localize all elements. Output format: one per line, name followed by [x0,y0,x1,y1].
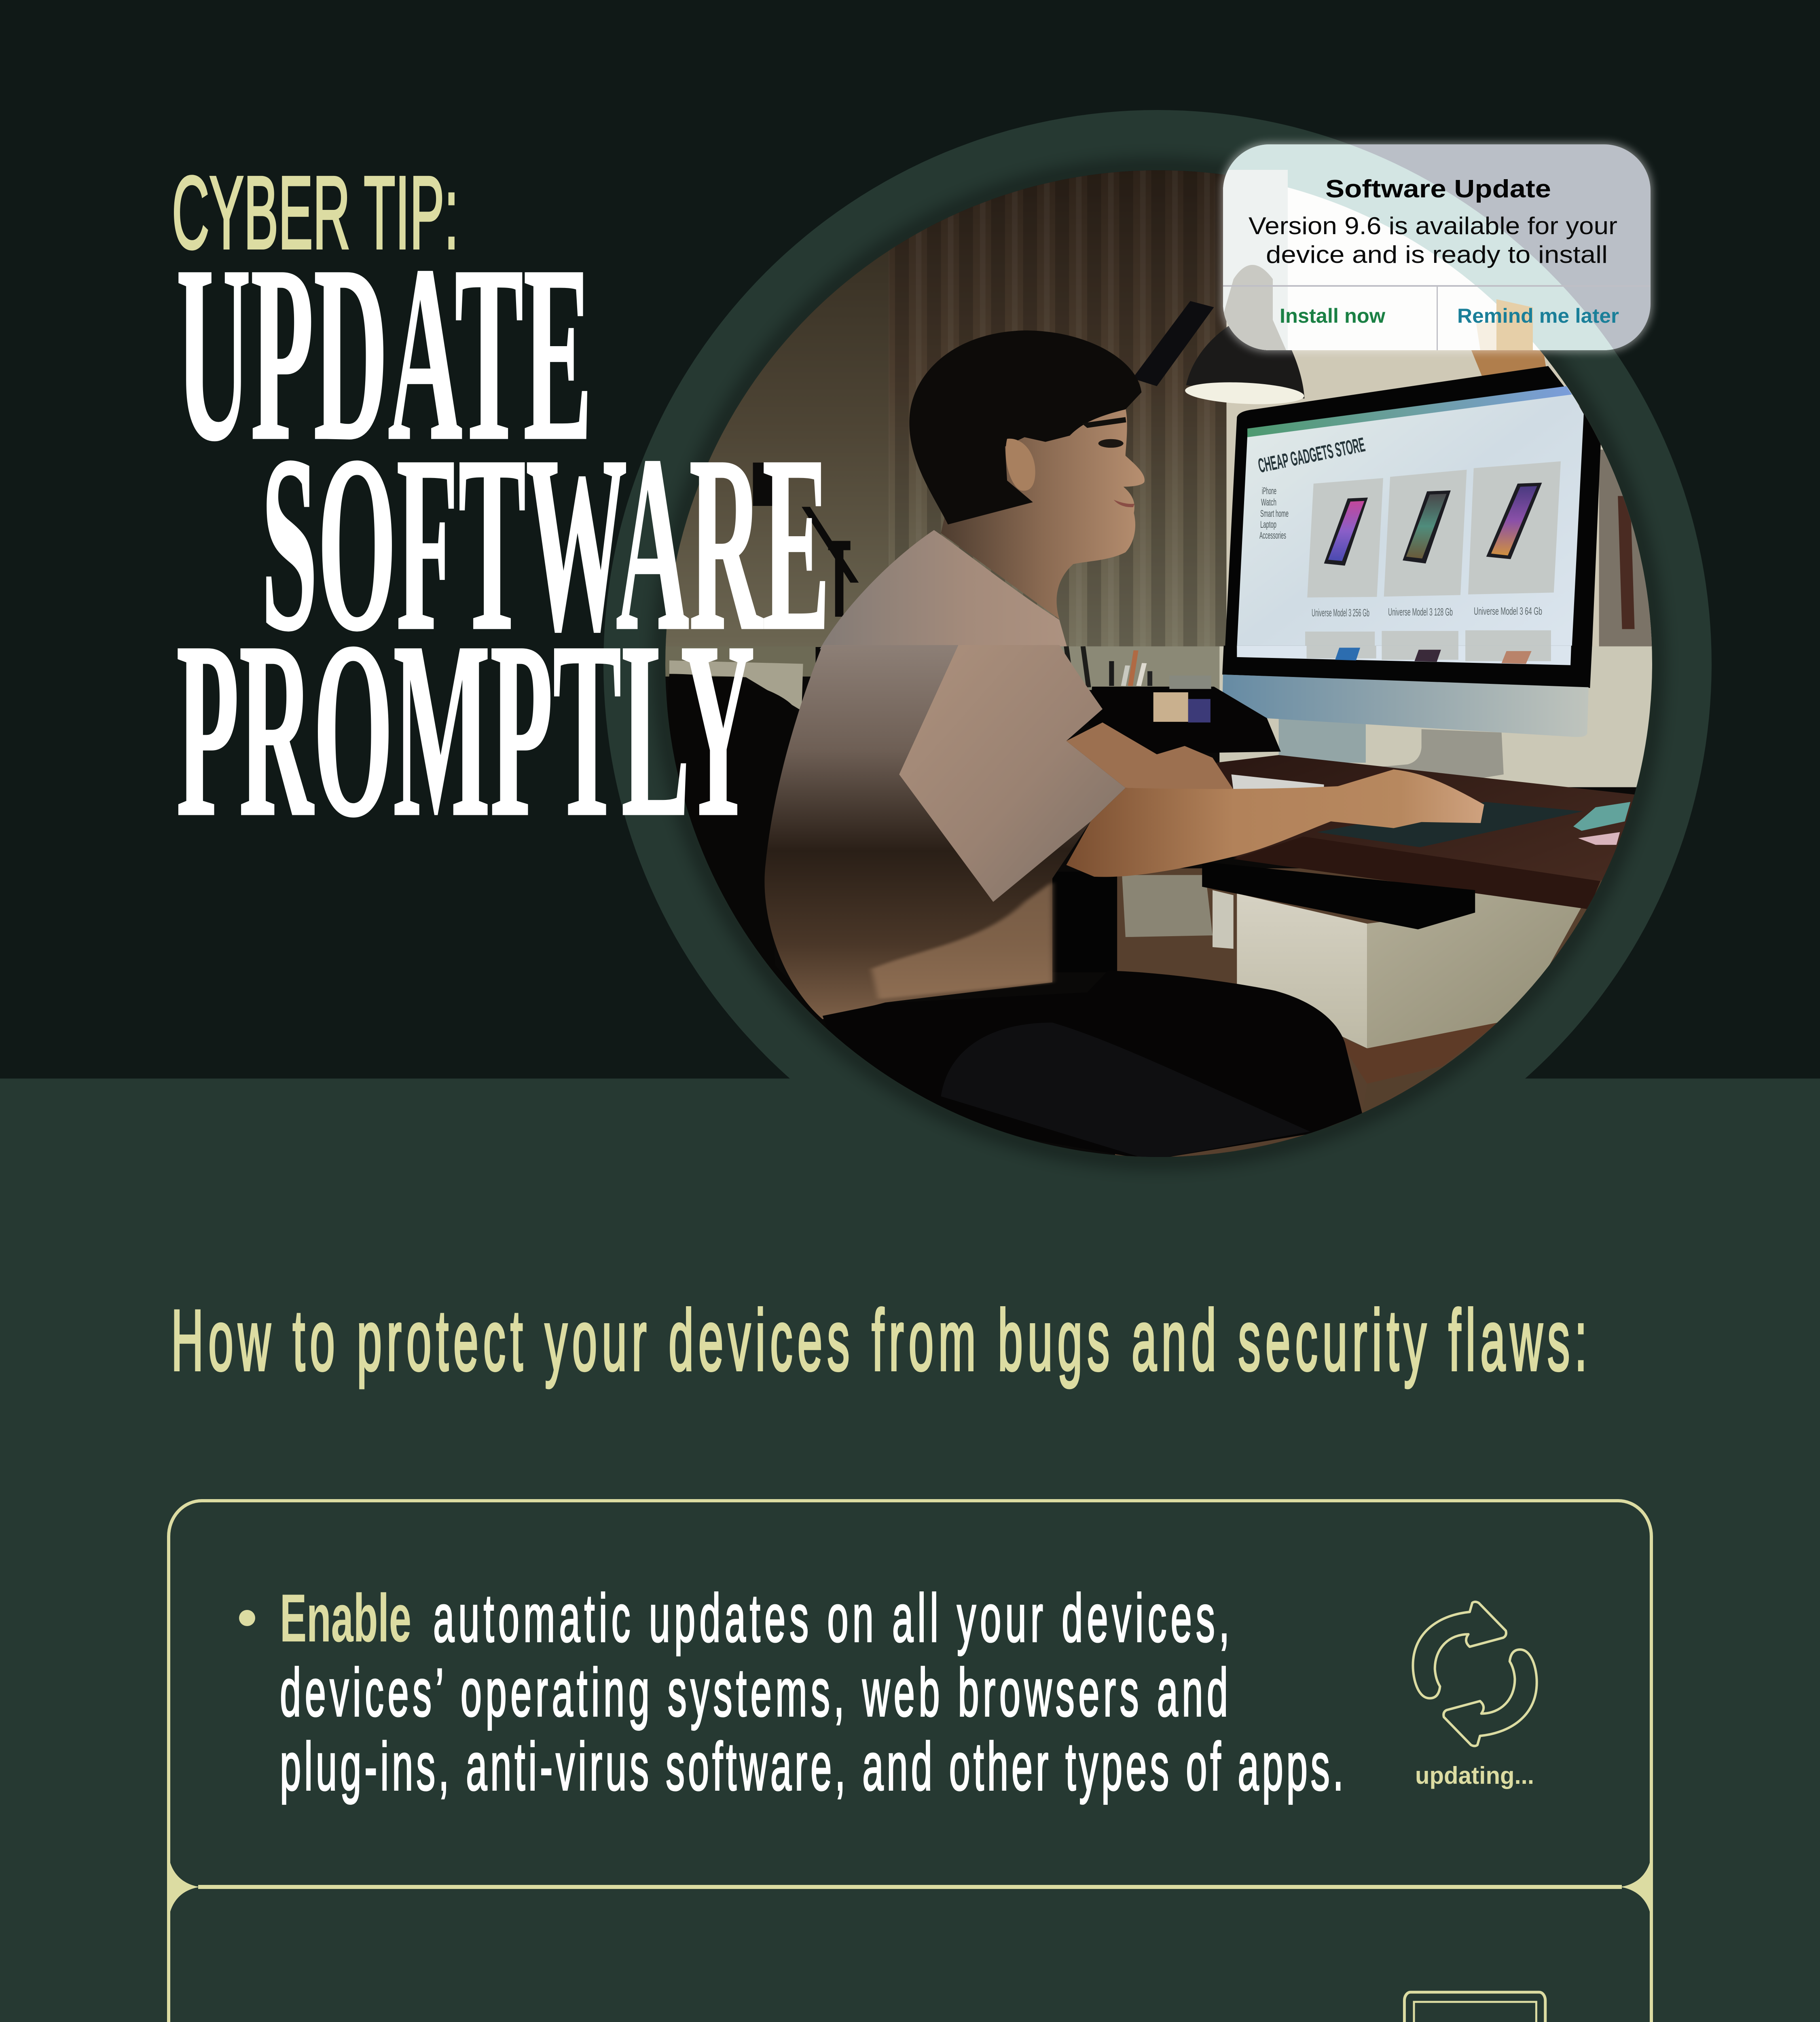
floor patch [1362,1066,1446,1114]
wallet and cards [1573,802,1630,831]
wall under desk [1237,893,1367,1048]
monitor chin [1222,675,1589,737]
popup panel [603,110,1712,1218]
mouse pad [1317,802,1583,847]
on-screen product labels: Universe Model 3 256 Gb [1312,607,1369,619]
popup title: Software Update [1325,175,1551,203]
keyword: enable: Enable [280,1580,411,1656]
on-screen product labels: Universe Model 3 64 Gb [1474,605,1542,617]
lower backgrounds [648,646,816,677]
desk lamp light [1182,380,1307,407]
screen header stripe [1247,386,1572,437]
background: dark hero band [0,0,1820,1079]
icon: update arrows [1413,1602,1537,1746]
forearm and mouse hand [1066,770,1484,877]
eye [1098,439,1124,448]
on-screen menu: Watch [1261,497,1276,508]
tip text [280,1580,1344,1804]
on-screen product labels: Universe Model 3 128 Gb [1388,606,1453,618]
ring soft shadow [663,168,1655,1159]
monitor stand [1321,729,1504,783]
shirt sleeve [899,645,1126,902]
back hand forearm [1066,723,1234,789]
hero photo: man at desktop computer [665,170,1652,1157]
shirt upper [820,530,1068,649]
on-screen menu: iPhone [1262,486,1276,497]
ear [1006,439,1035,491]
desk lamp arm [1132,301,1214,386]
on-screen menu [1259,486,1289,541]
chair post [1051,871,1117,972]
on-screen product labels [1312,605,1542,619]
tan shadow on torso [871,882,1052,999]
popup message: Version 9.6 is available for your [1249,212,1617,239]
phones on screen [1324,497,1368,566]
panels frame [169,1501,1651,2022]
title block [172,155,830,869]
panel: enable automatic updates [239,1580,1344,1804]
popup message [1249,212,1617,268]
hero ring circle [603,110,1712,1218]
desk drawer [1202,862,1475,929]
install button: Install now [1280,305,1385,327]
text: SOFTWARE [261,404,830,683]
monitor screen [1237,386,1584,647]
photo upper scene [607,162,1658,650]
face and neck [941,408,1145,619]
desk lamp shade [1186,323,1304,398]
hair [909,330,1141,525]
product cards [1305,461,1561,650]
photo lower scene [648,645,1665,1160]
kicker: cyber tip: CYBER TIP: [172,155,459,271]
tip text: automatic updates on all your devices, [433,1580,1230,1656]
monitor bezel lower [1222,646,1592,688]
office chair back [648,674,830,1083]
text: PROMPTLY [176,590,755,869]
icon: tablet app list [1404,1992,1545,2022]
remind button: Remind me later [1457,305,1619,327]
bullet [239,1610,255,1626]
seated legs and armrest [823,971,1362,1160]
mouth [1114,500,1134,507]
torso [764,645,1126,1019]
section heading: How to protect your devices from bugs and security flaws: [171,1292,1587,1389]
notification popup: software update [603,110,1712,1218]
eyebrow [1081,417,1126,428]
desk top [1216,755,1635,909]
popup message: device and is ready to install [1266,241,1608,268]
tip text: plug-ins, anti-virus software, and other types of apps. [280,1728,1344,1804]
monitor screen lower [1237,646,1571,665]
on-screen menu: Smart home [1260,508,1289,519]
icon caption: updating: updating... [1415,1762,1534,1789]
pen organiser [1089,687,1281,754]
panel: regularly review [239,2020,1096,2022]
hero photo: man at desktop computer: CHEAP GADGETS STORE [1256,433,1367,477]
keyboard [1232,774,1324,791]
title block: UPDATE [176,214,592,493]
monitor bezel [1225,366,1601,647]
desk front edge [1234,836,1600,909]
popup glow [1221,143,1652,352]
on-screen menu: Accessories [1259,530,1286,541]
left floor lamp [753,463,859,617]
on-screen menu: Laptop [1260,519,1276,530]
tip text: devices’ operating systems, web browsers and [280,1654,1228,1730]
